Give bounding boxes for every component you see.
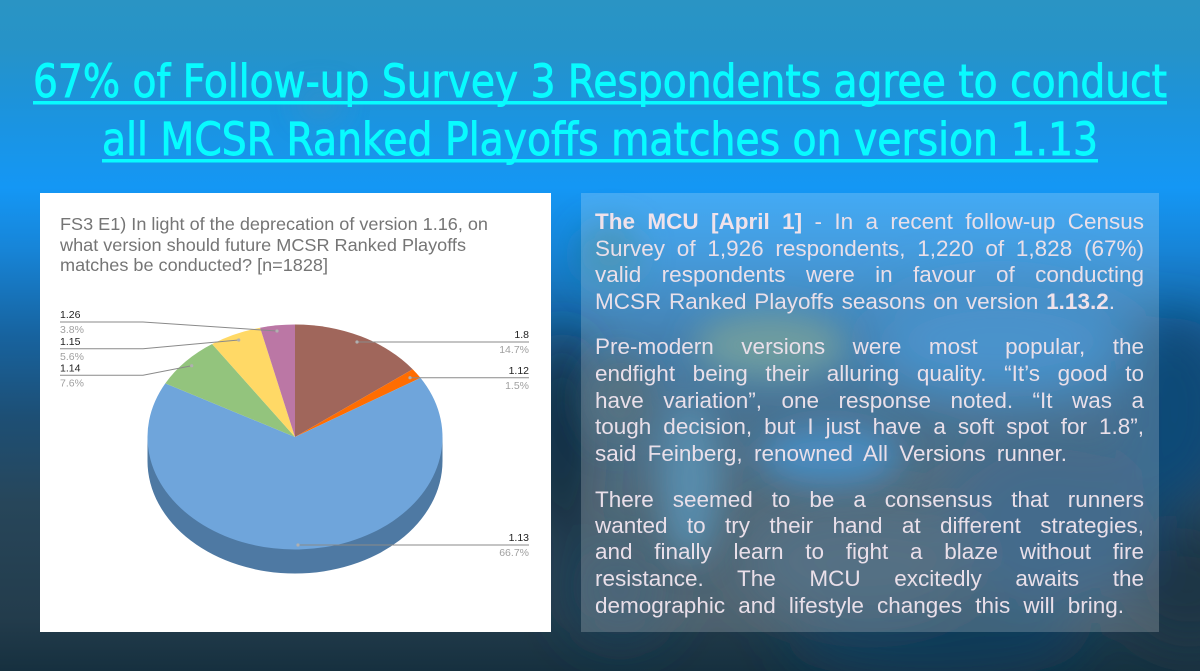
chart heading	[59, 214, 488, 275]
article paragraph 1: Survey of 1,926 respondents, 1,220 of 1,828 (67%)	[595, 236, 1144, 261]
slice 1.26	[260, 324, 295, 437]
article paragraph 2: said Feinberg, renowned All Versions runner.	[595, 441, 1067, 466]
article paragraph 2: Pre-modern versions were most popular, the	[595, 334, 1144, 359]
title	[33, 55, 1167, 166]
label 1.26: 3.8%	[60, 324, 84, 336]
panel: article text	[581, 193, 1159, 632]
article paragraph 1	[595, 209, 1144, 314]
data labels	[60, 309, 529, 559]
label 1.12: 1.12	[509, 365, 529, 377]
label 1.12: 1.5%	[505, 380, 529, 392]
pie side wall	[148, 437, 442, 574]
slice 1.12	[295, 369, 420, 437]
chart heading: what version should future MCSR Ranked Playoffs	[59, 235, 466, 255]
label 1.8	[499, 329, 529, 356]
title line 1 underline	[33, 101, 1167, 104]
label 1.26: 1.26	[60, 309, 81, 321]
leader lines	[60, 322, 529, 545]
label 1.14	[60, 362, 84, 390]
label 1.8: 1.8	[514, 329, 529, 341]
article paragraph 3: resistance. The MCU excitedly awaits the	[595, 566, 1144, 591]
article paragraph 1: The MCU [April 1] - In a recent follow-up Census	[595, 209, 1144, 234]
label 1.15: 5.6%	[60, 351, 84, 363]
slice 1.8	[295, 324, 413, 437]
label 1.14: 7.6%	[60, 378, 84, 390]
label 1.13	[499, 532, 529, 559]
label 1.15: 1.15	[60, 336, 81, 348]
slice 1.15	[212, 328, 295, 437]
slice 1.13	[147, 378, 442, 549]
article paragraph 2: tough decision, but I just have a soft spot for 1.8”,	[595, 414, 1144, 439]
article paragraph 3: There seemed to be a consensus that runners	[595, 487, 1144, 512]
leader end dots	[190, 329, 412, 547]
pie slices	[147, 324, 442, 549]
article paragraph 2	[595, 334, 1144, 466]
chart background	[40, 193, 551, 632]
article paragraph 1: valid respondents were in favour of conducting	[595, 262, 1144, 287]
title line 2 underline	[102, 159, 1098, 162]
chart heading: matches be conducted? [n=1828]	[60, 255, 328, 275]
slice 1.14	[165, 344, 295, 437]
article paragraph 3: wanted to try their hand at different strategies,	[595, 513, 1144, 538]
label 1.26	[60, 309, 84, 336]
label 1.13: 66.7%	[499, 547, 529, 559]
article paragraph 2: endfight being their alluring quality. “It’s good to	[595, 361, 1144, 386]
panel: pie chart	[40, 193, 551, 632]
label 1.14: 1.14	[60, 362, 81, 374]
article paragraph 3: demographic and lifestyle changes this will bring.	[595, 593, 1124, 618]
article paragraph 2: have variation”, one response noted. “It was a	[595, 388, 1144, 413]
text: MCSR Ranked Playoffs seasons on version 1.13.2.	[595, 289, 1115, 314]
label 1.8: 14.7%	[499, 344, 529, 356]
label 1.15	[60, 336, 84, 363]
chart heading: FS3 E1) In light of the deprecation of version 1.16, on	[60, 214, 488, 234]
label 1.12	[505, 365, 529, 392]
article paragraph 3: and finally learn to fight a blaze without fire	[595, 539, 1144, 564]
label 1.13: 1.13	[509, 532, 529, 544]
